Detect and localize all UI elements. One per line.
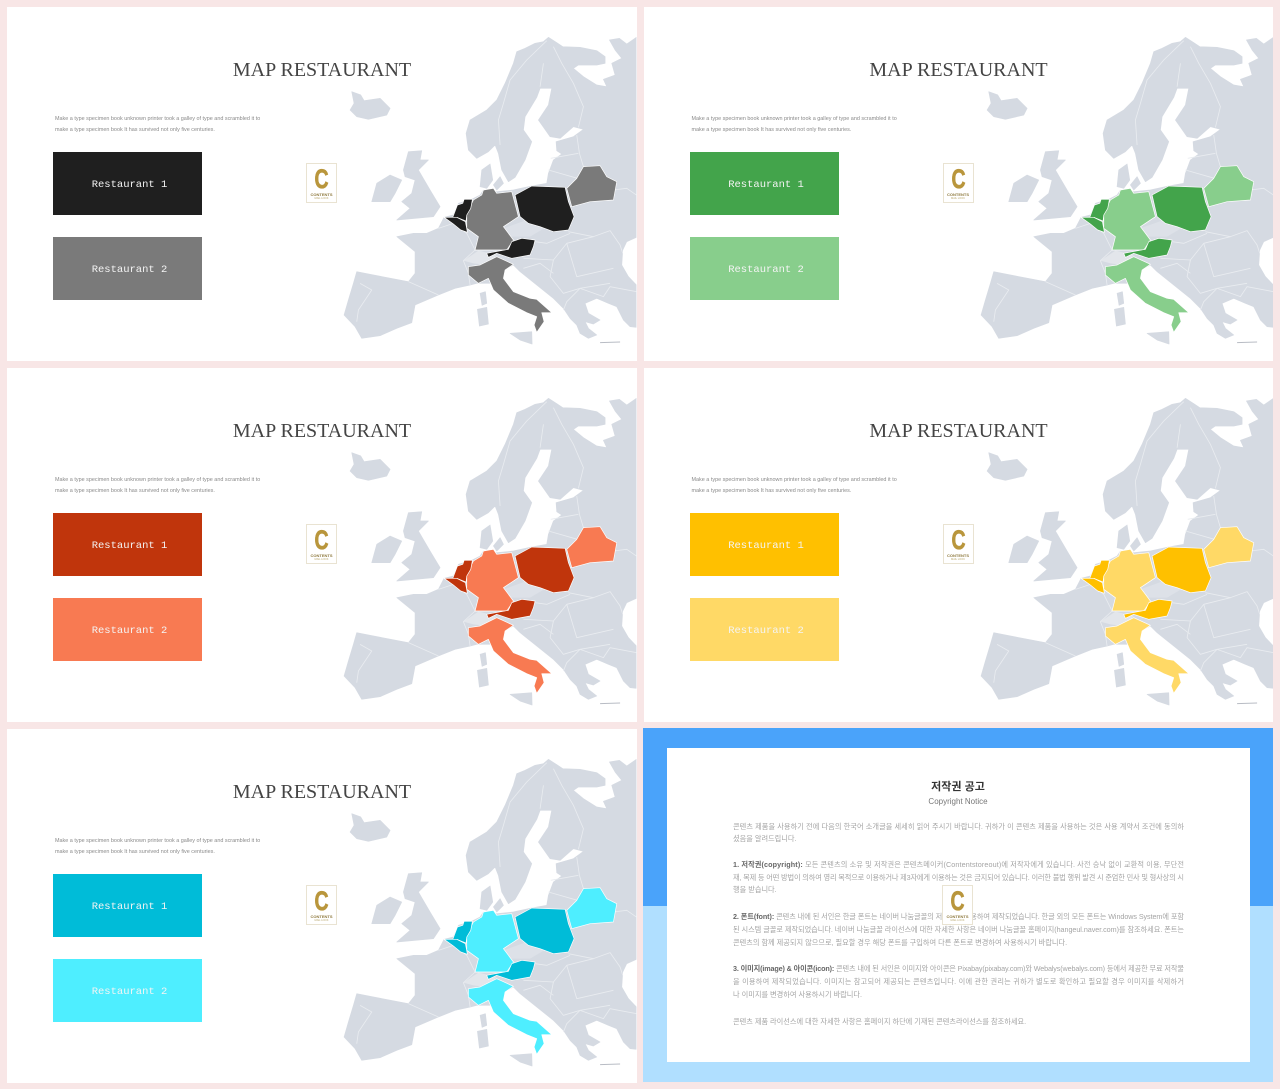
- button: restaurant 1: Restaurant 1: [92, 901, 167, 913]
- white notice card: [667, 748, 1250, 1062]
- map: black highlights: [344, 37, 636, 344]
- notice text: 나 이미지를 변경하여 사용하시기 바랍니다.: [733, 990, 862, 999]
- button: restaurant 1: [53, 513, 202, 576]
- logo: C: [951, 164, 965, 194]
- button: restaurant 1: Restaurant 1: [92, 179, 167, 191]
- button: restaurant 1: Restaurant 1: [728, 179, 804, 191]
- notice text: 된 시스템 글꼴로 제작되었습니다. 네이버 나눔글꼴 라이선스에 대한 자세한 사항은 네이버 나눔글꼴 홈페이지(hangeul.naver.com)를 참조하세요. 폰트는: [733, 925, 1184, 934]
- logo: C: [314, 886, 329, 916]
- notice text: 을 이용하여 제작되었습니다. 이미지는 참고되어 제공되는 콘텐츠입니다. 이에 관한 권리는 귀하가 별도로 확인하고 필요할 경우 이미지를 삭제하거: [733, 977, 1184, 986]
- button: restaurant 2: [690, 598, 838, 661]
- logo: C: [314, 164, 329, 194]
- button: restaurant 1: Restaurant 1: [92, 540, 167, 552]
- notice text: 2. 폰트(font): 콘텐츠 내에 된 서인은 한글 폰트는 네이버 나눔글꼴의 저작권을 사용하여 제작되었습니다. 한글 외의 모든 폰트는 Windows System에 포함: [733, 912, 1184, 921]
- map: cyan highlights: [344, 759, 636, 1066]
- map: red highlights: [344, 398, 636, 706]
- button: restaurant 2: [53, 598, 202, 661]
- logo: MAIL LOOK: [951, 197, 965, 200]
- description: make a type specimen book It has survived not only five centuries.: [692, 127, 851, 133]
- button: restaurant 2: Restaurant 2: [92, 625, 167, 637]
- description: Make a type specimen book unknown printer took a galley of type and scrambled it to: [55, 116, 260, 122]
- button: restaurant 2: Restaurant 2: [92, 986, 167, 998]
- logo: CONTENTS: [947, 192, 969, 197]
- panel: green slide: [644, 7, 1273, 360]
- logo: CONTENTS: [946, 914, 968, 919]
- notice text: 3. 이미지(image) & 아이콘(icon): 콘텐츠 내에 된 서인은 이미지와 아이콘은 Pixabay(pixabay.com)와 Webalys(webalys.com) 등에서 제공한 무료 저작물: [733, 964, 1184, 973]
- button: restaurant 1: [690, 152, 838, 215]
- button: restaurant 2: [53, 959, 202, 1022]
- logo: [306, 524, 337, 564]
- logo: CONTENTS: [310, 914, 332, 919]
- panel: red slide: [7, 368, 636, 722]
- button: restaurant 2: Restaurant 2: [92, 264, 167, 276]
- description: make a type specimen book It has survived not only five centuries.: [55, 849, 215, 855]
- heading: MAP RESTAURANT: [233, 420, 411, 442]
- description: [55, 477, 260, 494]
- notice text: [733, 779, 1184, 1026]
- description: make a type specimen book It has survived not only five centuries.: [55, 127, 215, 133]
- notice text: 1. 저작권(copyright): 모든 콘텐츠의 소유 및 저작권은 콘텐츠메이커(Contentstoreout)에 저작자에게 있습니다. 사전 승낙 없이 교환적 이용, 무단전: [733, 860, 1184, 869]
- notice text: 재, 복제 등 어떤 방법이 의하여 영리 목적으로 이용하거나 제3자에게 이용하는 것은 금지되어 있습니다. 이러한 불법 행위 발견 시 준엄한 민사 및 형사상의 시: [733, 873, 1184, 882]
- heading: MAP RESTAURANT: [869, 420, 1048, 442]
- logo: MAIL LOOK: [951, 919, 964, 922]
- panel: cyan slide: [7, 729, 636, 1082]
- logo: [942, 885, 973, 925]
- description: [692, 477, 897, 494]
- description: make a type specimen book It has survived not only five centuries.: [55, 488, 215, 494]
- logo: MAIL LOOK: [315, 919, 328, 922]
- heading: MAP RESTAURANT: [233, 781, 411, 803]
- logo: MAIL LOOK: [315, 558, 328, 561]
- logo: C: [950, 886, 965, 916]
- description: Make a type specimen book unknown printer took a galley of type and scrambled it to: [692, 477, 897, 483]
- button: restaurant 1: [53, 152, 202, 215]
- panel: copyright notice: [643, 728, 1273, 1082]
- logo: MAIL LOOK: [315, 197, 328, 200]
- notice text: 행을 받습니다.: [733, 885, 777, 894]
- panel: yellow slide: [644, 368, 1273, 722]
- logo: [942, 163, 974, 203]
- logo: CONTENTS: [310, 192, 332, 197]
- notice text: 셨음을 알려드립니다.: [733, 834, 797, 843]
- logo: CONTENTS: [947, 553, 969, 558]
- button: restaurant 1: [690, 513, 838, 576]
- notice text: 저작권 공고: [931, 779, 985, 793]
- description: make a type specimen book It has survived not only five centuries.: [692, 488, 851, 494]
- description: [692, 116, 897, 133]
- button: restaurant 2: Restaurant 2: [728, 264, 804, 276]
- notice text: 콘텐츠 제품을 사용하기 전에 다음의 한국어 소개글을 세세히 읽어 주시기 바랍니다. 귀하가 이 콘텐츠 제품을 사용하는 것은 사용 계약서 조건에 동의하: [733, 822, 1184, 831]
- logo: [942, 524, 974, 564]
- notice text: 콘텐츠 제품 라이선스에 대한 자세한 사항은 홈페이지 하단에 기재된 콘텐츠라이선스를 참조하세요.: [733, 1017, 1026, 1026]
- description: Make a type specimen book unknown printer took a galley of type and scrambled it to: [55, 838, 260, 844]
- logo: MAIL LOOK: [951, 558, 965, 561]
- button: restaurant 2: Restaurant 2: [728, 625, 804, 637]
- description: Make a type specimen book unknown printer took a galley of type and scrambled it to: [692, 116, 897, 122]
- notice text: 콘텐츠의 함께 제공되지 않으므로, 필요할 경우 해당 폰트를 구입하여 다른 폰트로 변경하여 사용하시기 바랍니다.: [733, 938, 1067, 947]
- map: yellow highlights: [980, 398, 1273, 706]
- notice text: Copyright Notice: [928, 797, 988, 806]
- map: green highlights: [980, 37, 1273, 344]
- heading: MAP RESTAURANT: [869, 59, 1048, 81]
- logo: CONTENTS: [310, 553, 332, 558]
- logo: [306, 163, 337, 203]
- button: restaurant 1: Restaurant 1: [728, 540, 804, 552]
- heading: MAP RESTAURANT: [233, 59, 411, 81]
- logo: C: [314, 525, 329, 555]
- button: restaurant 1: [53, 874, 202, 937]
- logo: [306, 885, 337, 925]
- description: [55, 116, 260, 133]
- logo: C: [951, 525, 965, 555]
- description: Make a type specimen book unknown printer took a galley of type and scrambled it to: [55, 477, 260, 483]
- button: restaurant 2: [53, 237, 202, 300]
- description: [55, 838, 260, 855]
- panel: black slide: [7, 7, 636, 360]
- button: restaurant 2: [690, 237, 838, 300]
